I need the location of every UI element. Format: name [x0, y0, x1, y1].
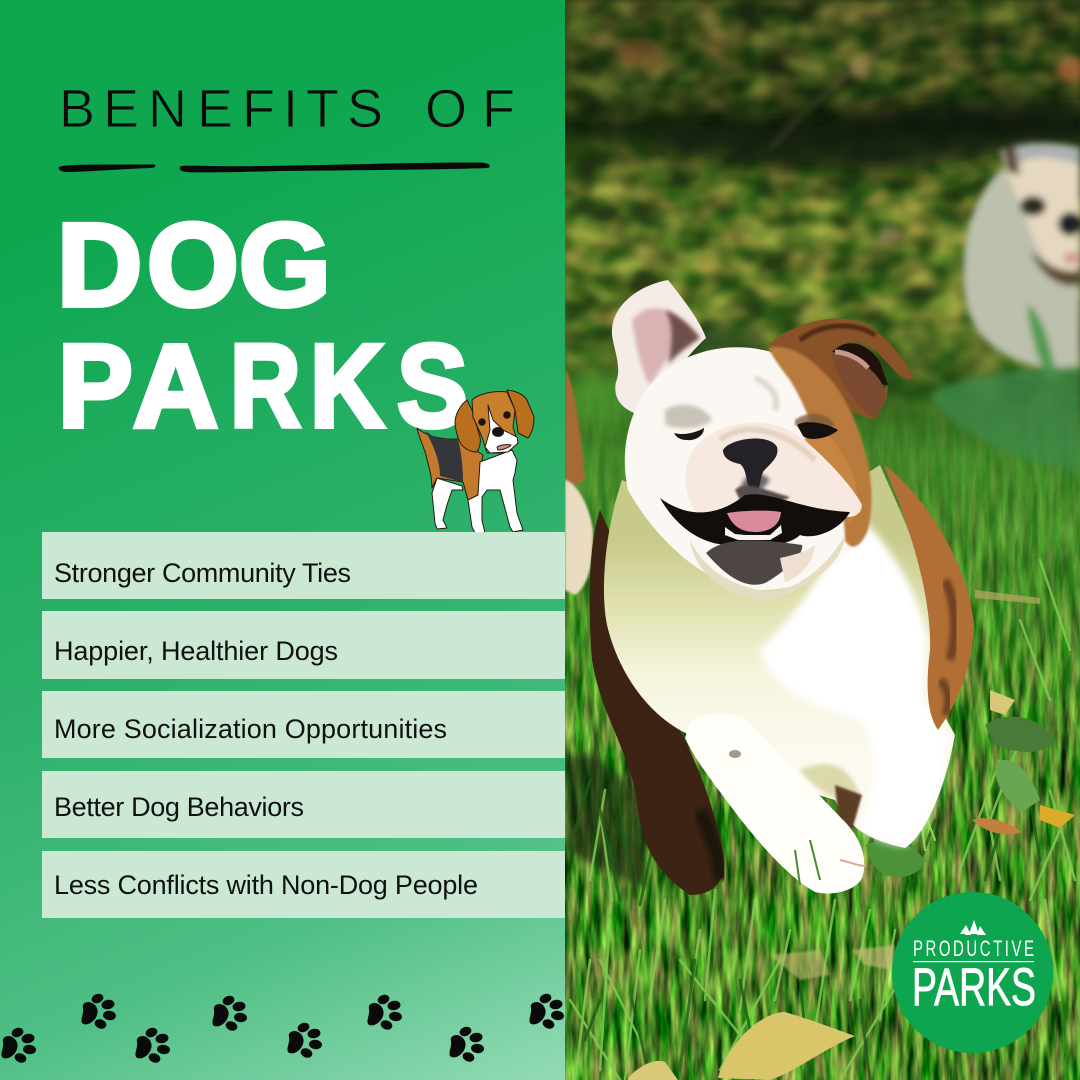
blaze — [485, 405, 518, 453]
logo text: PRODUCTIVE: PRODUCTIVE — [913, 936, 1034, 961]
row: Happier, Healthier Dogs — [42, 611, 565, 679]
title: DOG PARKS: P — [58, 321, 133, 452]
title: DOG PARKS: DOG — [57, 200, 331, 332]
paw 3 — [135, 1026, 170, 1064]
bulldog: open mouth — [660, 494, 850, 600]
black saddle — [425, 430, 463, 482]
row: More Socialization Opportunities — [42, 691, 565, 758]
paw 2 — [81, 992, 116, 1030]
icon: trees — [960, 920, 986, 935]
title: DOG PARKS: K — [310, 321, 384, 452]
grass blades — [570, 560, 1075, 1080]
row: Happier, Healthier Dogs: Happier, Healthier Dogs — [54, 636, 338, 666]
title: DOG PARKS — [57, 200, 468, 452]
paw 7 — [449, 1025, 484, 1063]
bulldog: left ear — [612, 280, 706, 415]
logo: Productive Parks badge — [892, 892, 1053, 1053]
row: Stronger Community Ties: Stronger Community Ties — [54, 558, 351, 588]
title: DOG PARKS: S — [397, 319, 468, 452]
bulldog: right ear — [768, 319, 913, 420]
paw 8 — [529, 992, 564, 1030]
paw 4 — [212, 994, 247, 1032]
row: Better Dog Behaviors: Better Dog Behaviors — [54, 792, 304, 822]
panel: green gradient sidebar — [0, 0, 565, 1080]
paw 5 — [287, 1021, 322, 1059]
grass texture — [565, 380, 1080, 1080]
tail and body — [417, 428, 483, 503]
row: Less Conflicts with Non-Dog People: Less Conflicts with Non-Dog People — [54, 870, 478, 900]
bulldog: head — [625, 347, 872, 590]
eyes — [674, 428, 704, 440]
leaves on the ground — [628, 590, 1075, 1080]
paw 6 — [367, 993, 402, 1031]
front legs and chest — [468, 450, 523, 533]
row: More Socialization Opportunities: More Socialization Opportunities — [54, 714, 447, 744]
paw 1 — [1, 1026, 36, 1064]
title: DOG PARKS: A — [133, 320, 218, 452]
hind leg — [432, 478, 463, 529]
nose — [723, 439, 777, 492]
icon: beagle illustration — [417, 390, 534, 533]
background bulldog, out of focus — [930, 143, 1080, 470]
bulldog: white body — [604, 465, 974, 848]
brush underline — [59, 162, 490, 172]
photo: bulldog running on grass — [560, 0, 1080, 1080]
row: Less Conflicts with Non-Dog People — [42, 851, 565, 918]
heading: BENEFITS OF: BENEFITS OF — [59, 79, 515, 139]
head — [472, 391, 518, 453]
row: Stronger Community Ties — [42, 532, 565, 599]
list: benefits — [42, 532, 565, 918]
muzzle folds — [686, 423, 862, 517]
bulldog: front leg — [685, 714, 866, 893]
right ear — [507, 390, 534, 438]
icons: paw prints row — [1, 992, 564, 1064]
left ear — [455, 400, 480, 452]
title: DOG PARKS: R — [230, 320, 301, 452]
row: Better Dog Behaviors — [42, 771, 565, 838]
bulldog: hind leg and dark flank — [590, 510, 723, 895]
second dog at left edge — [565, 368, 593, 595]
blurred background foliage — [565, 0, 1080, 712]
